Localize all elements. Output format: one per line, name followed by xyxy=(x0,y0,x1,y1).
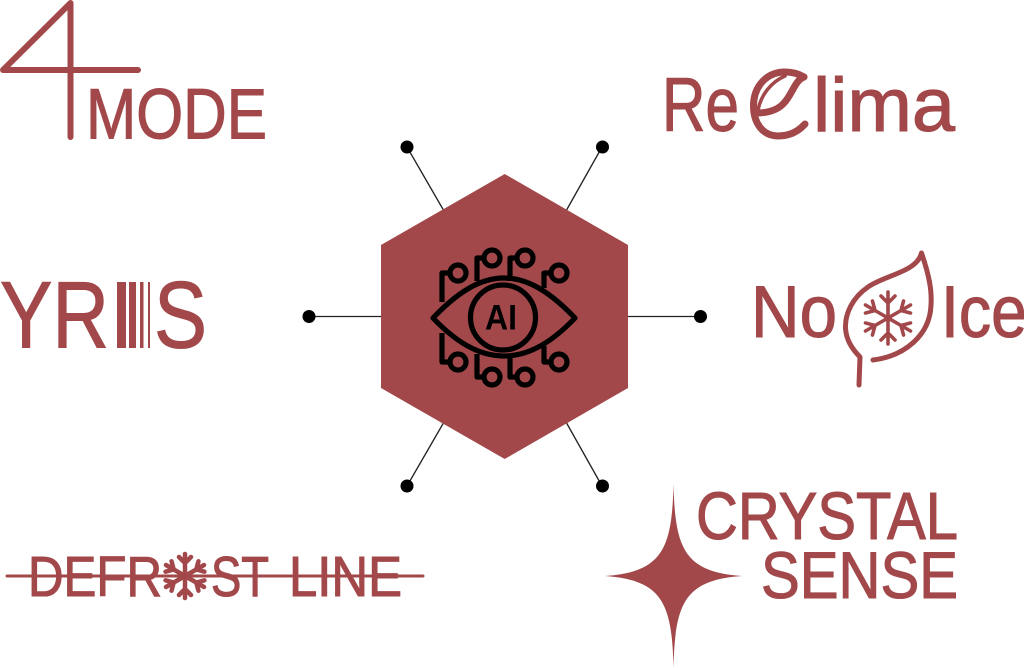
logo: No Ice xyxy=(751,253,1024,385)
logo: DEFROST LINE: DEFR xyxy=(28,545,162,609)
icon: AI eye with circuit nodes: AI xyxy=(485,298,517,338)
logo: ReClima: lima xyxy=(813,63,956,148)
logo: DEFROST LINE: ST xyxy=(211,545,269,609)
logo: DEFROST LINE xyxy=(7,545,423,609)
logo: 4MODE xyxy=(3,3,267,154)
logo: YRIIS xyxy=(0,262,207,368)
logo: CRYSTAL SENSE: CRYSTAL xyxy=(696,479,958,554)
logo: YRIIS: YR xyxy=(0,262,109,368)
central hexagon xyxy=(381,174,628,459)
connector lines and nodes xyxy=(302,140,707,492)
icon: AI eye with circuit nodes xyxy=(433,250,575,385)
logo: CRYSTAL SENSE xyxy=(605,479,958,668)
logo: No Ice: No xyxy=(751,272,837,353)
logo: YRIIS: S xyxy=(154,262,207,368)
logo: ReClima: Re xyxy=(662,63,739,148)
logo: DEFROST LINE: LINE xyxy=(289,545,402,609)
logo: ReClima xyxy=(662,63,956,148)
logo: 4MODE: MODE xyxy=(86,76,267,154)
logo: CRYSTAL SENSE: SENSE xyxy=(761,538,958,612)
